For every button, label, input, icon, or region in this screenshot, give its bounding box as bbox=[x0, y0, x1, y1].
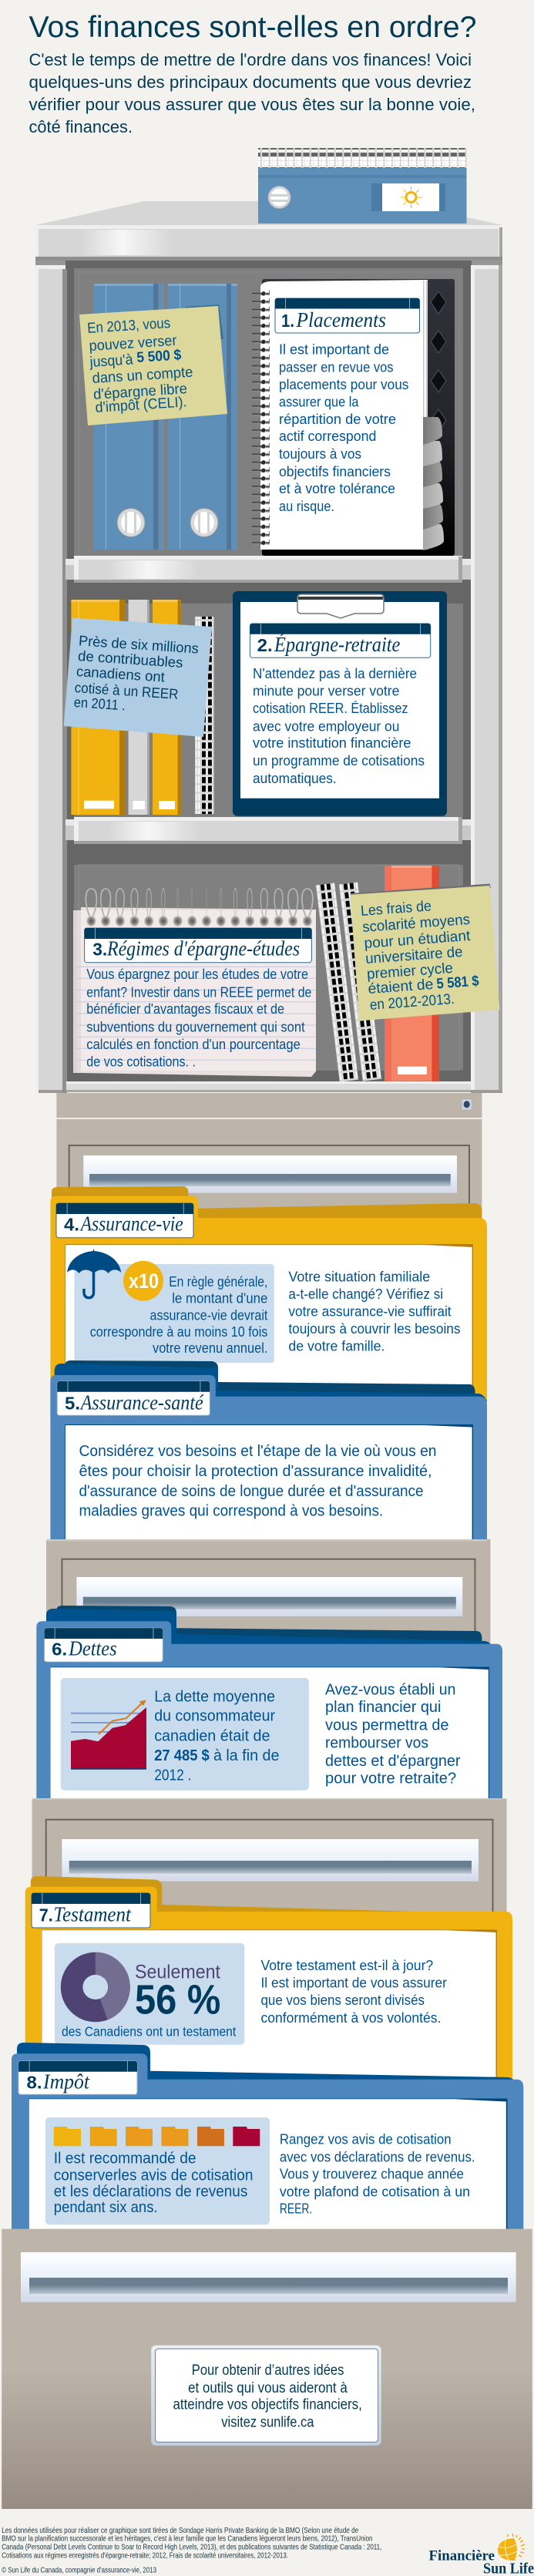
body text bbox=[86, 967, 311, 1069]
callout box: Il est recommandé de bbox=[54, 2151, 196, 2167]
sticky note: REER bbox=[64, 618, 212, 737]
drawer handle bbox=[21, 2252, 516, 2302]
intro text: côté finances. bbox=[29, 117, 133, 136]
folder 5 Assurance-sante bbox=[50, 1360, 487, 1539]
icon: x10 badge bbox=[123, 1261, 163, 1301]
page bbox=[42, 1930, 497, 2081]
body text: toujours à vos bbox=[279, 446, 361, 462]
intro text: C'est le temps de mettre de l'ordre dans vos finances! Voici bbox=[29, 50, 472, 69]
body text bbox=[79, 1443, 436, 1520]
body text: votre institution financière bbox=[253, 735, 411, 751]
callout box: et les déclarations de revenus bbox=[54, 2183, 247, 2200]
red binder bbox=[385, 866, 439, 1081]
panel: notebook 1 Placements bbox=[252, 279, 455, 556]
call to action box: et outils qui vous aideront à bbox=[188, 2380, 348, 2396]
heading label: 1. bbox=[281, 311, 294, 331]
body text: maladies graves qui correspond à vos besoins. bbox=[79, 1503, 383, 1520]
sticky note: CELI: jusqu'à bbox=[89, 351, 134, 371]
tab label bbox=[57, 1381, 210, 1415]
sticky note: frais de scolarite: premier cycle bbox=[366, 960, 454, 983]
folder 4 Assurance-vie bbox=[50, 1186, 487, 1418]
tab label: 8. bbox=[26, 2072, 42, 2092]
clip bbox=[297, 594, 384, 618]
tab label: Assurance-santé bbox=[79, 1391, 204, 1414]
callout box: assurance-vie devrait bbox=[149, 1307, 267, 1323]
ruled lines bbox=[77, 967, 316, 1060]
body text: Avez-vous établi un bbox=[325, 1681, 455, 1698]
sticky note: CELI: d'impôt (CELI). bbox=[95, 394, 187, 416]
drawer handle bbox=[83, 1155, 457, 1193]
tab label bbox=[56, 1203, 193, 1238]
body text: Vous y trouverez chaque année bbox=[280, 2167, 464, 2182]
call to action box: atteindre vos objectifs financiers, bbox=[173, 2397, 362, 2413]
panel: clipboard 2 Epargne-retraite bbox=[233, 591, 447, 816]
body text: que vos biens seront divisés bbox=[260, 1993, 425, 2008]
callout box bbox=[67, 1249, 274, 1363]
right pillar bbox=[471, 265, 502, 1093]
sticky note: frais de scolarite: 5 581 $ bbox=[436, 973, 480, 992]
title: Vos finances sont-elles en ordre? bbox=[29, 11, 476, 44]
heading label: Placements bbox=[296, 308, 386, 331]
body text: N'attendez pas à la dernière bbox=[253, 666, 417, 681]
heading label: 3. bbox=[92, 939, 107, 959]
icon: x10 badge: x10 bbox=[129, 1270, 159, 1293]
intro text: vérifier pour vous assurer que vous êtes sur la bonne voie, bbox=[29, 95, 475, 114]
front folder bbox=[36, 1621, 502, 1798]
footnote sources bbox=[2, 2526, 381, 2575]
tab label: 6. bbox=[52, 1639, 67, 1660]
shelf 3 bottom bbox=[66, 1081, 471, 1092]
tilted spiral-bound books bbox=[316, 883, 381, 1082]
callout box: canadien était de bbox=[154, 1727, 270, 1744]
front folder bbox=[50, 1196, 487, 1418]
body text: conformément à vos volontés. bbox=[260, 2010, 441, 2026]
sticky note: CELI: d'épargne libre bbox=[92, 381, 188, 403]
page bbox=[29, 2098, 507, 2229]
body text: Il est important de bbox=[279, 341, 389, 357]
yellow binders bbox=[71, 600, 181, 815]
front folder bbox=[25, 1887, 512, 2081]
lock bbox=[462, 1099, 472, 1110]
sticky note: frais de scolarite: pour un étudiant bbox=[364, 928, 472, 952]
front folder bbox=[50, 1375, 487, 1539]
body text bbox=[325, 1681, 461, 1787]
footnote sources: Les données utilisées pour réaliser ce graphique sont tirées de Sondage Harris Private Banking de la BMO (Selon une étude de bbox=[2, 2526, 358, 2535]
body text: assurer que la bbox=[279, 394, 359, 409]
body text: avec votre employeur ou bbox=[253, 718, 399, 734]
body text: Il est important de vous assurer bbox=[260, 1976, 447, 1991]
sticky note: REER: de contribuables bbox=[78, 647, 183, 671]
intro text bbox=[29, 50, 475, 136]
body text bbox=[288, 1270, 461, 1354]
page bbox=[260, 280, 428, 550]
body text: automatiques. bbox=[253, 771, 337, 786]
drawer handle bbox=[76, 1577, 462, 1616]
shelf 1 bbox=[65, 556, 471, 583]
body text: actif correspond bbox=[279, 429, 376, 444]
tab label bbox=[18, 2061, 137, 2094]
filing drawer 1 bbox=[56, 1093, 482, 1548]
filing drawer 2 bbox=[46, 1539, 490, 1801]
body text: pour votre retraite? bbox=[325, 1770, 456, 1787]
body text: Votre situation familiale bbox=[288, 1270, 430, 1285]
panel: notepad 3 Regimes d'epargne-etudes bbox=[73, 889, 316, 1077]
icon: sun globe bbox=[498, 2534, 525, 2561]
body text: placements pour vous bbox=[279, 377, 408, 392]
body text: d'assurance de soins de longue durée et d'assurance bbox=[79, 1483, 424, 1500]
body text: enfant? Investir dans un REEE permet de bbox=[86, 984, 311, 1000]
spiral rings bbox=[252, 290, 270, 547]
body text: Rangez vos avis de cotisation bbox=[280, 2132, 452, 2147]
body text: a-t-elle changé? Vérifiez si bbox=[288, 1286, 443, 1302]
body text bbox=[253, 666, 425, 786]
folder 6 Dettes bbox=[36, 1606, 502, 1799]
folder 7 Testament bbox=[25, 1876, 512, 2081]
filing drawer 3 bbox=[32, 1798, 507, 2234]
body text: au risque. bbox=[279, 499, 334, 514]
body text: calculés en fonction d'un pourcentage bbox=[86, 1037, 301, 1052]
sticky note: frais de scolarite: étaient de bbox=[368, 977, 434, 997]
back folder bbox=[56, 1606, 482, 1646]
sticky note: frais de scolarite: en 2012-2013. bbox=[369, 991, 455, 1014]
sticky note: CELI: 5 500 $ bbox=[136, 347, 182, 366]
body text: un programme de cotisations bbox=[253, 753, 425, 768]
call to action box: Pour obtenir d’autres idées bbox=[192, 2362, 344, 2379]
area chart with arrow bbox=[71, 1700, 146, 1770]
drawer handle bbox=[62, 1839, 479, 1882]
donut chart bbox=[61, 1952, 130, 2022]
callout box: pendant six ans. bbox=[54, 2199, 158, 2216]
callout box: conserverles avis de cotisation bbox=[54, 2167, 253, 2184]
icons: folders bbox=[54, 2127, 260, 2146]
back folder bbox=[52, 1186, 482, 1226]
body text: Votre testament est-il à jour? bbox=[260, 1958, 433, 1973]
heading label bbox=[250, 624, 431, 657]
sticky note: CELI: En 2013, vous bbox=[87, 315, 171, 337]
body text: de votre famille. bbox=[288, 1339, 385, 1354]
callout box: du consommateur bbox=[154, 1707, 275, 1724]
body text: et à votre tolérance bbox=[279, 481, 395, 496]
body text: de vos cotisations. . bbox=[86, 1054, 196, 1069]
heading label bbox=[275, 298, 419, 333]
body text bbox=[280, 2132, 475, 2217]
front folder bbox=[12, 2053, 523, 2229]
diamond pattern bbox=[431, 291, 446, 432]
sticky note: REER: cotisé à un REER bbox=[74, 679, 179, 702]
tab label: Testament bbox=[53, 1903, 132, 1926]
sticky note: REER: canadiens ont bbox=[76, 663, 165, 685]
sticky note: CELI: dans un compte bbox=[92, 365, 193, 387]
body text: votre plafond de cotisation à un bbox=[280, 2184, 470, 2199]
heading label: Épargne-retraite bbox=[274, 633, 400, 656]
callout box: à la fin de bbox=[213, 1747, 279, 1764]
callout box: le montant d'une bbox=[172, 1291, 267, 1306]
callout box bbox=[61, 1678, 309, 1791]
logo: Financiere Sun Life: Financière bbox=[428, 2548, 495, 2564]
cabinet top surface bbox=[35, 201, 502, 225]
callout box: 27 485 $ bbox=[154, 1747, 210, 1764]
sticky note: REER: en 2011 . bbox=[73, 694, 126, 713]
call to action box: visitez sunlife.ca bbox=[221, 2414, 314, 2430]
shelf 2 bbox=[65, 817, 471, 844]
page bbox=[65, 1244, 473, 1414]
bookcase bbox=[35, 201, 502, 1093]
back folder bbox=[31, 1876, 432, 1919]
body text: plan financier qui bbox=[325, 1699, 441, 1716]
heading label bbox=[85, 928, 311, 963]
blue binders bbox=[94, 284, 237, 550]
logo: Financiere Sun Life bbox=[428, 2534, 534, 2576]
binder lying on top bbox=[258, 148, 467, 224]
body text: vous permettra de bbox=[325, 1717, 448, 1734]
sticky note: CELI bbox=[79, 304, 227, 425]
sticky note: CELI: pouvez verser bbox=[89, 333, 178, 355]
inner cabinet bbox=[65, 261, 472, 1082]
filing drawer 4 bbox=[2, 2229, 532, 2509]
folder 8 Impot bbox=[12, 2043, 523, 2229]
sticky note: frais de scolarite bbox=[350, 883, 499, 1021]
callout box: 56 % bbox=[135, 1977, 220, 2023]
tab label bbox=[45, 1628, 163, 1662]
heading label: 2. bbox=[257, 635, 273, 655]
callout box: En règle générale, bbox=[169, 1274, 267, 1290]
sticky note: frais de scolarite: Les frais de bbox=[360, 898, 432, 920]
middle folder bbox=[55, 1364, 487, 1401]
callout box bbox=[45, 2117, 270, 2225]
tab label: 5. bbox=[65, 1393, 80, 1413]
footnote sources: © Sun Life du Canada, compagnie d'assurance-vie, 2013 bbox=[2, 2566, 156, 2575]
callout box: Seulement bbox=[135, 1962, 220, 1983]
page bbox=[65, 1424, 473, 1539]
callout box: votre revenu annuel. bbox=[153, 1340, 267, 1356]
footnote sources: Cotisations aux régimes enregistrés d'épargne-retraite; 2012, Frais de scolarité universitaires, 2012-2013. bbox=[2, 2551, 288, 2561]
call to action box bbox=[151, 2346, 381, 2446]
body text: REER. bbox=[280, 2201, 312, 2217]
index tabs bbox=[423, 417, 444, 550]
body text: toujours à couvrir les besoins bbox=[288, 1321, 461, 1337]
spiral-bound book spine bbox=[195, 617, 214, 814]
icon: umbrella bbox=[67, 1249, 121, 1298]
body text bbox=[279, 341, 408, 514]
sticky note: frais de scolarite: universitaire de bbox=[365, 944, 463, 967]
tab label: Assurance-vie bbox=[79, 1212, 183, 1236]
sticky note: REER: Près de six millions bbox=[78, 632, 199, 657]
intro text: quelques-uns des principaux documents que vous devriez bbox=[29, 72, 472, 92]
back folder bbox=[65, 1360, 475, 1399]
tab label: Impôt bbox=[42, 2070, 90, 2093]
tab label: Dettes bbox=[68, 1637, 117, 1660]
tab label: 7. bbox=[39, 1905, 53, 1925]
footnote sources: BMO sur la planification successorale et les héritages, c'est à leur famille que les Canadiens légueront leurs biens, 2012), TransUnion bbox=[2, 2534, 373, 2544]
heading label: Régimes d'épargne-études bbox=[106, 937, 300, 960]
icon: sun bbox=[401, 187, 422, 208]
body text: minute pour verser votre bbox=[253, 683, 399, 698]
body text: objectifs financiers bbox=[279, 464, 391, 479]
sticky note: frais de scolarite: scolarité moyens bbox=[362, 912, 471, 936]
tab label bbox=[32, 1893, 150, 1928]
body text: cotisation REER. Établissez bbox=[253, 701, 408, 716]
callout box: 2012 . bbox=[154, 1767, 191, 1784]
spiral rings bbox=[86, 889, 313, 926]
body text: Considérez vos besoins et l'étape de la vie où vous en bbox=[79, 1443, 436, 1460]
body text: répartition de votre bbox=[279, 412, 396, 427]
page bbox=[50, 1666, 489, 1799]
cabinet header bbox=[35, 225, 502, 265]
body text: êtes pour choisir la protection d'assurance invalidité, bbox=[79, 1463, 432, 1480]
callout box: des Canadiens ont un testament bbox=[62, 2024, 236, 2040]
middle folder bbox=[46, 1609, 493, 1646]
callout box bbox=[55, 1943, 244, 2045]
body text: rembourser vos bbox=[325, 1735, 428, 1752]
left pillar bbox=[35, 265, 67, 1093]
body text: subventions du gouvernement qui sont bbox=[86, 1019, 305, 1034]
tab label: 4. bbox=[64, 1215, 79, 1235]
body text: avec vos déclarations de revenus. bbox=[280, 2149, 475, 2164]
body text: votre assurance-vie suffirait bbox=[288, 1304, 452, 1320]
body text: Vous épargnez pour les études de votre bbox=[86, 967, 308, 982]
back folder bbox=[17, 2043, 515, 2081]
footnote sources: Canada (Personal Debt Levels Continue to Soar to Record High Levels, 2013), et des publications suivantes de Statistique Canada : 2011, bbox=[2, 2543, 381, 2552]
body text: dettes et d'épargner bbox=[325, 1753, 461, 1770]
callout box: correspondre à au moins 10 fois bbox=[90, 1324, 267, 1340]
body text: passer en revue vos bbox=[279, 360, 393, 375]
body text bbox=[260, 1958, 447, 2026]
body text: bénéficier d'avantages fiscaux et de bbox=[86, 1001, 284, 1017]
callout box: La dette moyenne bbox=[154, 1688, 275, 1705]
